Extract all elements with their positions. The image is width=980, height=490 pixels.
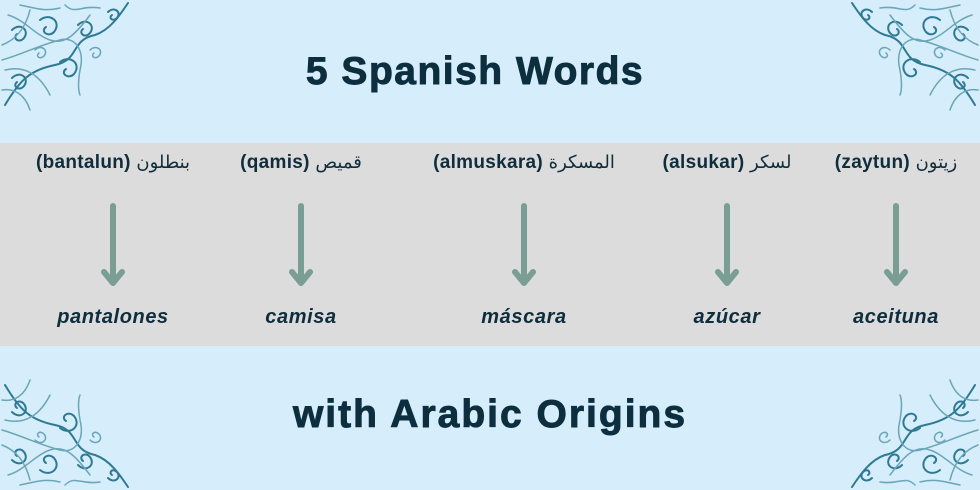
column: máscara: (almuskara) المسكرة — [433, 152, 615, 173]
subtitle: with Arabic Origins — [293, 393, 687, 436]
column: aceituna: aceituna — [853, 306, 939, 328]
column: aceituna — [835, 152, 957, 328]
corner ornament: bottom left — [1, 379, 129, 488]
column: aceituna: (zaytun) زيتون — [835, 152, 957, 173]
corner ornament: bottom right — [851, 379, 979, 488]
corner ornament: top left — [1, 2, 129, 111]
column: camisa: (qamis) قميص — [240, 152, 362, 173]
title: 5 Spanish Words — [306, 50, 644, 93]
corner ornament: top right — [851, 2, 979, 111]
column: pantalones: (bantalun) بنطلون — [36, 152, 190, 173]
column: máscara — [433, 152, 615, 328]
panel: word band — [0, 143, 980, 346]
column: camisa: camisa — [265, 306, 337, 328]
column: azúcar: (alsukar) لسكر — [663, 152, 791, 173]
column: máscara: máscara — [481, 306, 567, 328]
column: camisa — [240, 152, 362, 328]
column: azúcar — [663, 152, 791, 328]
column: pantalones — [36, 152, 190, 328]
column: azúcar: azúcar — [694, 306, 760, 328]
column: pantalones: pantalones — [57, 306, 169, 328]
